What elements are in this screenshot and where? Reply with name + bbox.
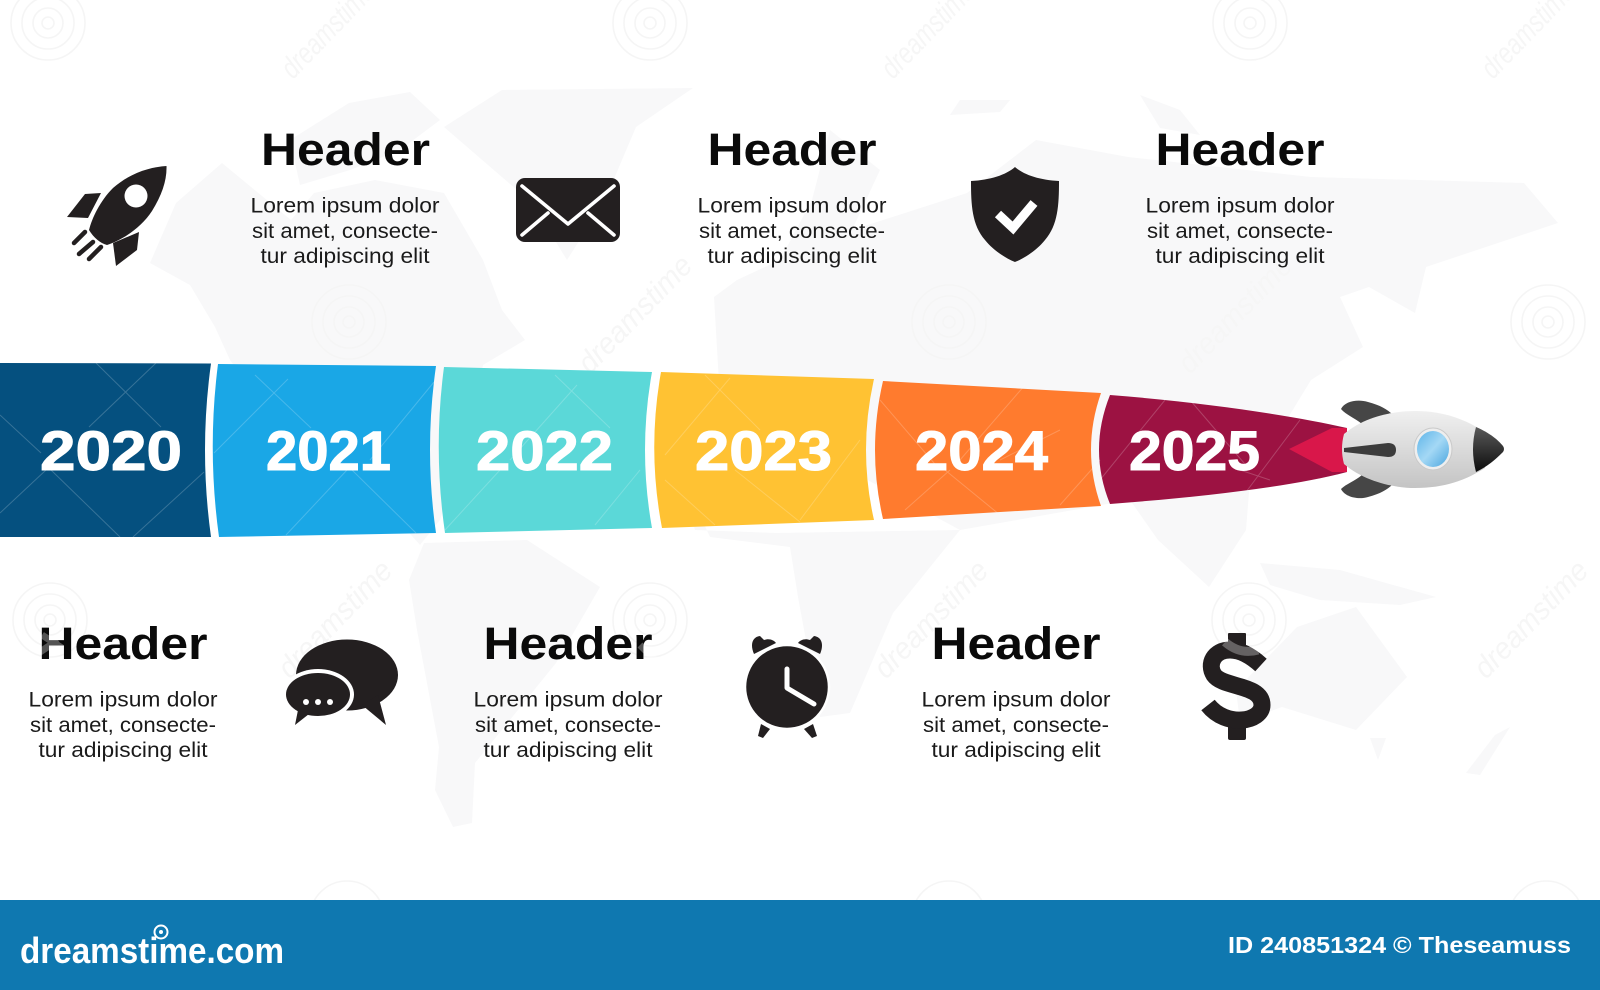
segment: 2023 [654, 372, 874, 528]
segment: 2020: 2020 [40, 419, 182, 482]
body text: tur adipiscing elit [38, 738, 208, 762]
watermark text: dreamstime [867, 554, 995, 685]
body text: Lorem ipsum dolor [474, 688, 662, 712]
segment: 2022: 2022 [476, 419, 613, 482]
body text: sit amet, consecte- [923, 713, 1109, 737]
heading: Header [484, 618, 652, 669]
footer credit: ID 240851324 © Theseamuss [1228, 932, 1571, 958]
text block: top 3 [1146, 124, 1334, 268]
body text: sit amet, consecte- [475, 713, 661, 737]
body text: sit amet, consecte- [30, 713, 216, 737]
heading: Header [1156, 124, 1324, 175]
heading: Header [38, 618, 208, 669]
rocket body [1342, 411, 1485, 488]
body text: tur adipiscing elit [260, 244, 430, 268]
rocket nose [1473, 427, 1504, 472]
icon: chat bubbles [282, 640, 398, 725]
text block: bottom 1 [28, 618, 218, 762]
space rocket [1341, 401, 1504, 498]
segment: 2024 [875, 381, 1101, 519]
icon: rocket [67, 166, 167, 266]
body text: sit amet, consecte- [252, 219, 438, 243]
body text: Lorem ipsum dolor [28, 688, 218, 712]
heading: Header [932, 618, 1100, 669]
icon: shield with check [971, 167, 1059, 262]
body text [28, 688, 218, 762]
watermark text: dreamstime [271, 554, 399, 685]
segment: 2024: 2024 [915, 419, 1048, 482]
heading: Header [708, 124, 876, 175]
segment: 2023: 2023 [695, 419, 832, 482]
body text: tur adipiscing elit [932, 738, 1101, 762]
body text [250, 194, 440, 268]
watermark text: dreamstime [1171, 249, 1299, 380]
body text: sit amet, consecte- [1147, 219, 1333, 243]
rocket side fin [1344, 443, 1396, 457]
rocket window [1414, 428, 1452, 470]
body text [1146, 194, 1334, 268]
body text [922, 688, 1110, 762]
segment: 2025: 2025 [1129, 419, 1260, 482]
body text: Lorem ipsum dolor [250, 194, 440, 218]
rocket exhaust flame [1289, 428, 1347, 472]
icon: alarm clock [745, 636, 829, 738]
body text: Lorem ipsum dolor [698, 194, 886, 218]
text block: top 1 [250, 124, 440, 268]
text block: top 2 [698, 124, 886, 268]
watermark overlay on dark icons and headings [40, 635, 1258, 660]
watermark text: dreamstime [571, 249, 699, 380]
timeline band [0, 363, 1347, 537]
footer logo: dreamstime.com [20, 930, 284, 971]
footer bar [0, 900, 1600, 990]
body text: tur adipiscing elit [484, 738, 653, 762]
body text [474, 688, 662, 762]
body text [698, 194, 886, 268]
body text: sit amet, consecte- [699, 219, 885, 243]
body text: tur adipiscing elit [1156, 244, 1325, 268]
segment: 2020 [0, 363, 211, 537]
band watermark lines [0, 363, 1300, 537]
segment: 2021: 2021 [266, 419, 391, 482]
text block: bottom 2 [474, 618, 662, 762]
segment: 2021 [213, 364, 436, 537]
body text: tur adipiscing elit [708, 244, 877, 268]
body text: Lorem ipsum dolor [1146, 194, 1334, 218]
watermark text: dreamstime [1467, 554, 1595, 685]
heading: Header [261, 124, 430, 175]
rocket top fin [1341, 401, 1392, 424]
world map background [150, 88, 1558, 827]
segment: 2022 [439, 367, 652, 533]
icon: dollar sign [1208, 633, 1262, 740]
body text: Lorem ipsum dolor [922, 688, 1110, 712]
rocket bottom fin [1341, 475, 1392, 498]
text block: bottom 3 [922, 618, 1110, 762]
watermark text [271, 0, 1595, 685]
icon: envelope [516, 178, 620, 242]
segment: 2025 [1099, 395, 1347, 504]
